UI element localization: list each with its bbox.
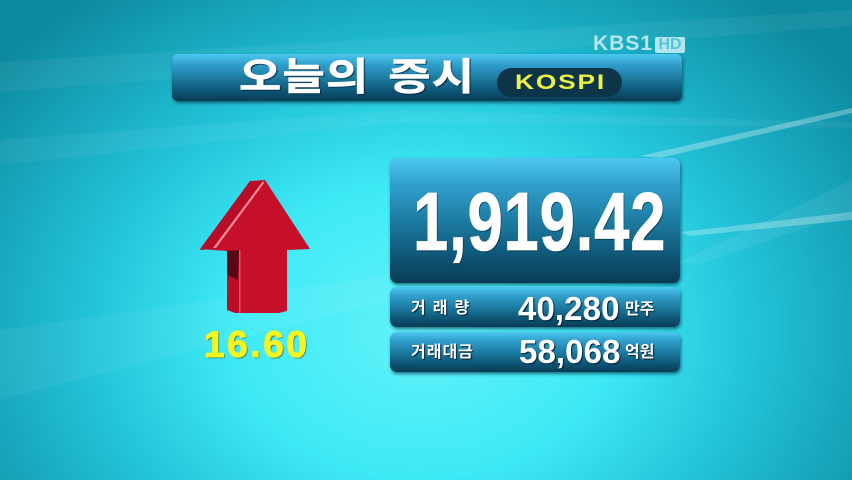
title: 오늘의 증시 [239, 57, 475, 99]
volume unit: 만주 [625, 301, 654, 318]
trading value unit: 억원 [625, 344, 654, 361]
logo: KBS1 HD: HD [658, 36, 682, 53]
volume value: 40,280 [518, 290, 620, 327]
icon: red up arrow [200, 180, 310, 313]
badge: KOSPI [497, 68, 622, 97]
badge: KOSPI: KOSPI [515, 71, 606, 94]
index number: 1,919.42 [413, 175, 666, 268]
panel: index value [390, 158, 680, 283]
logo: KBS1 HD [593, 32, 685, 55]
panel: trading volume [390, 287, 680, 327]
trading value label: 거래대금 [411, 344, 474, 361]
change value: 16.60 [204, 324, 310, 365]
panel: trading value [390, 332, 680, 372]
title bar [172, 54, 682, 101]
trading value number: 58,068 [519, 333, 621, 370]
logo: KBS1 HD: KBS1 [593, 32, 653, 55]
volume label: 거래량 [411, 300, 476, 317]
